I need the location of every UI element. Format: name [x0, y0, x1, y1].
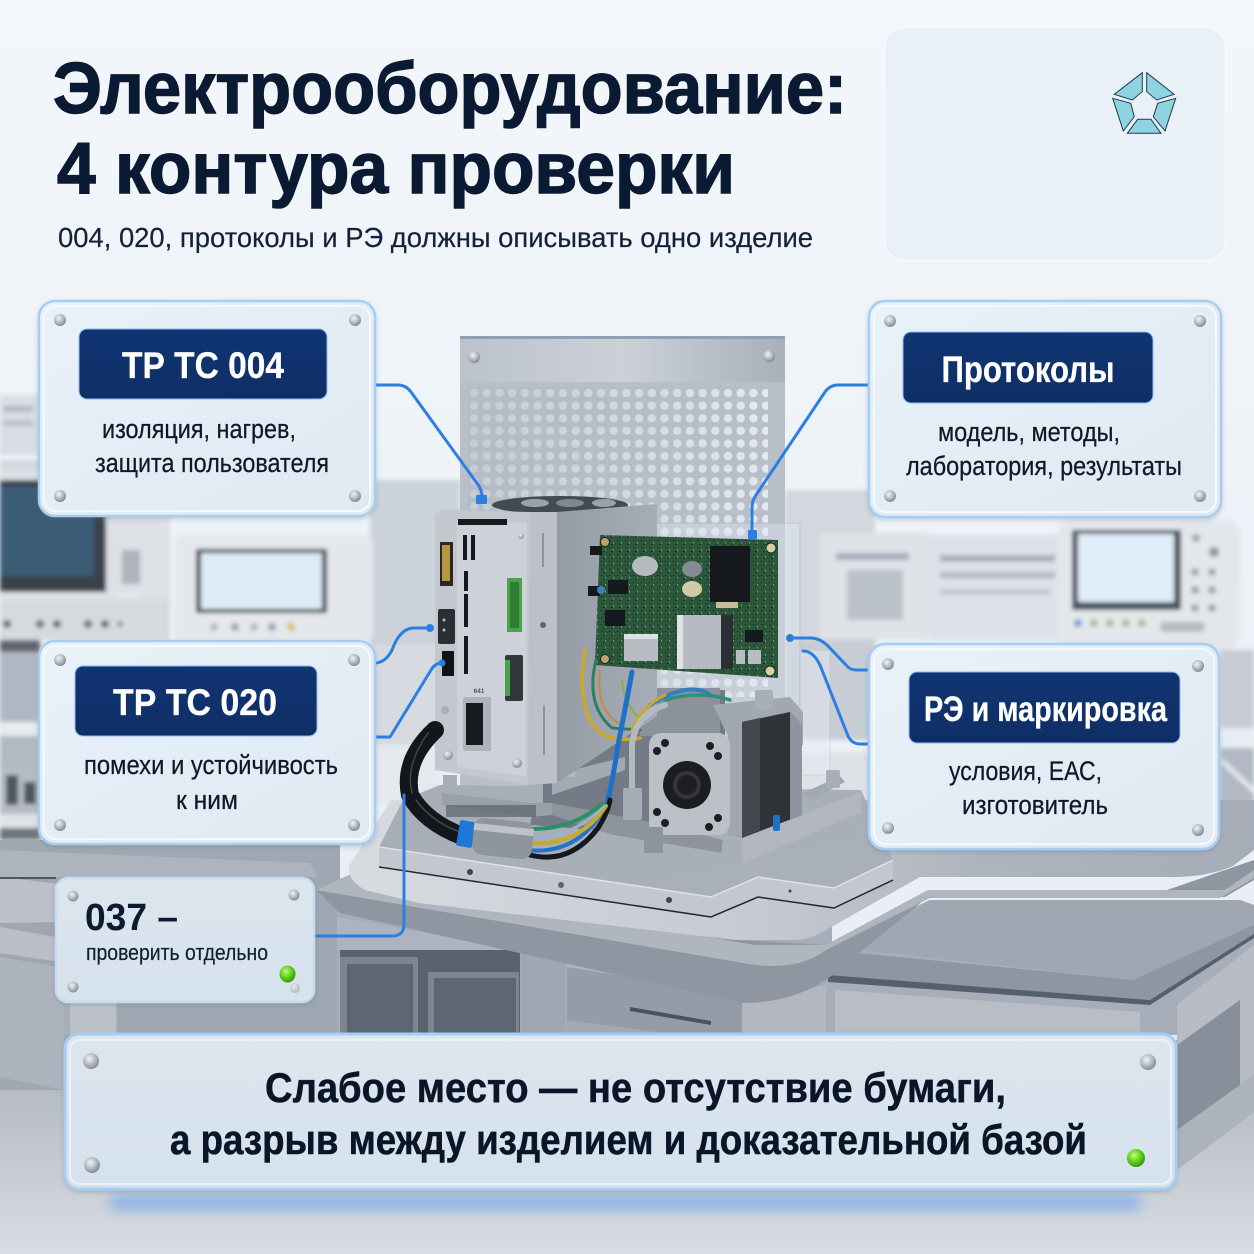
title: Электрооборудование: — [53, 49, 847, 129]
leader lines — [315, 385, 868, 936]
text: Слабое место — не отсутствие бумаги, — [265, 1064, 1006, 1111]
description: модель, методы, — [938, 417, 1120, 447]
text: а разрыв между изделием и доказательной базой — [170, 1116, 1087, 1163]
floor — [0, 1040, 1254, 1254]
central equipment: perforated back plate, controller, PCB, motor — [379, 336, 893, 917]
motor — [644, 690, 803, 868]
description: помехи и устойчивость — [84, 750, 338, 780]
description: изоляция, нагрев, — [102, 414, 296, 444]
panel: conclusion — [65, 1034, 1176, 1189]
controller box — [435, 504, 657, 785]
description — [95, 414, 329, 478]
back plate — [460, 336, 785, 790]
cable harness and connector — [409, 730, 610, 860]
acrylic panel — [628, 523, 830, 775]
text: проверить отдельно — [86, 940, 268, 965]
title: 4 контура проверки — [57, 129, 735, 209]
heading badge: ТР ТС 020 — [113, 682, 277, 723]
PCB — [588, 535, 778, 678]
controller box: 641 — [474, 688, 485, 695]
heading badge — [75, 666, 317, 736]
panel: ТР ТС 020 — [39, 641, 375, 844]
icon: pentagon logo — [1113, 73, 1176, 133]
heading badge — [909, 672, 1180, 743]
icon: green status LED — [1127, 1149, 1145, 1167]
center cabinets — [337, 900, 832, 1035]
heading badge: Протоколы — [942, 349, 1114, 390]
heading badge — [79, 329, 327, 399]
description: изготовитель — [962, 790, 1108, 820]
top vents — [492, 496, 628, 514]
right lower counter — [826, 900, 1254, 1170]
subtitle: 004, 020, протоколы и РЭ должны описывать одно изделие — [58, 222, 813, 253]
logo panel — [884, 28, 1226, 260]
text — [170, 1064, 1087, 1163]
panel: РЭ и маркировка — [869, 644, 1219, 849]
panel: 037 — [56, 878, 314, 1002]
base plate — [379, 785, 893, 917]
description: защита пользователя — [95, 448, 329, 478]
heading badge: РЭ и маркировка — [924, 690, 1167, 729]
platform counter — [316, 860, 1254, 1003]
heading badge: ТР ТС 004 — [122, 345, 284, 386]
description: условия, ЕАС, — [949, 756, 1102, 786]
mounting rails — [442, 688, 861, 863]
panel: ТР ТС 004 — [39, 301, 375, 516]
description — [906, 417, 1182, 481]
description: к ним — [176, 785, 238, 815]
title — [53, 49, 847, 209]
heading badge — [903, 332, 1153, 403]
panel: Протоколы — [869, 301, 1221, 517]
internal wires — [582, 650, 730, 820]
description — [949, 756, 1108, 820]
glow under bottom panel — [110, 1195, 1140, 1211]
description: лаборатория, результаты — [906, 451, 1182, 481]
left cabinets — [0, 840, 340, 1090]
description — [84, 750, 338, 815]
text: 037 – — [85, 897, 178, 939]
text — [85, 897, 268, 965]
icon: green status LED — [280, 966, 296, 982]
